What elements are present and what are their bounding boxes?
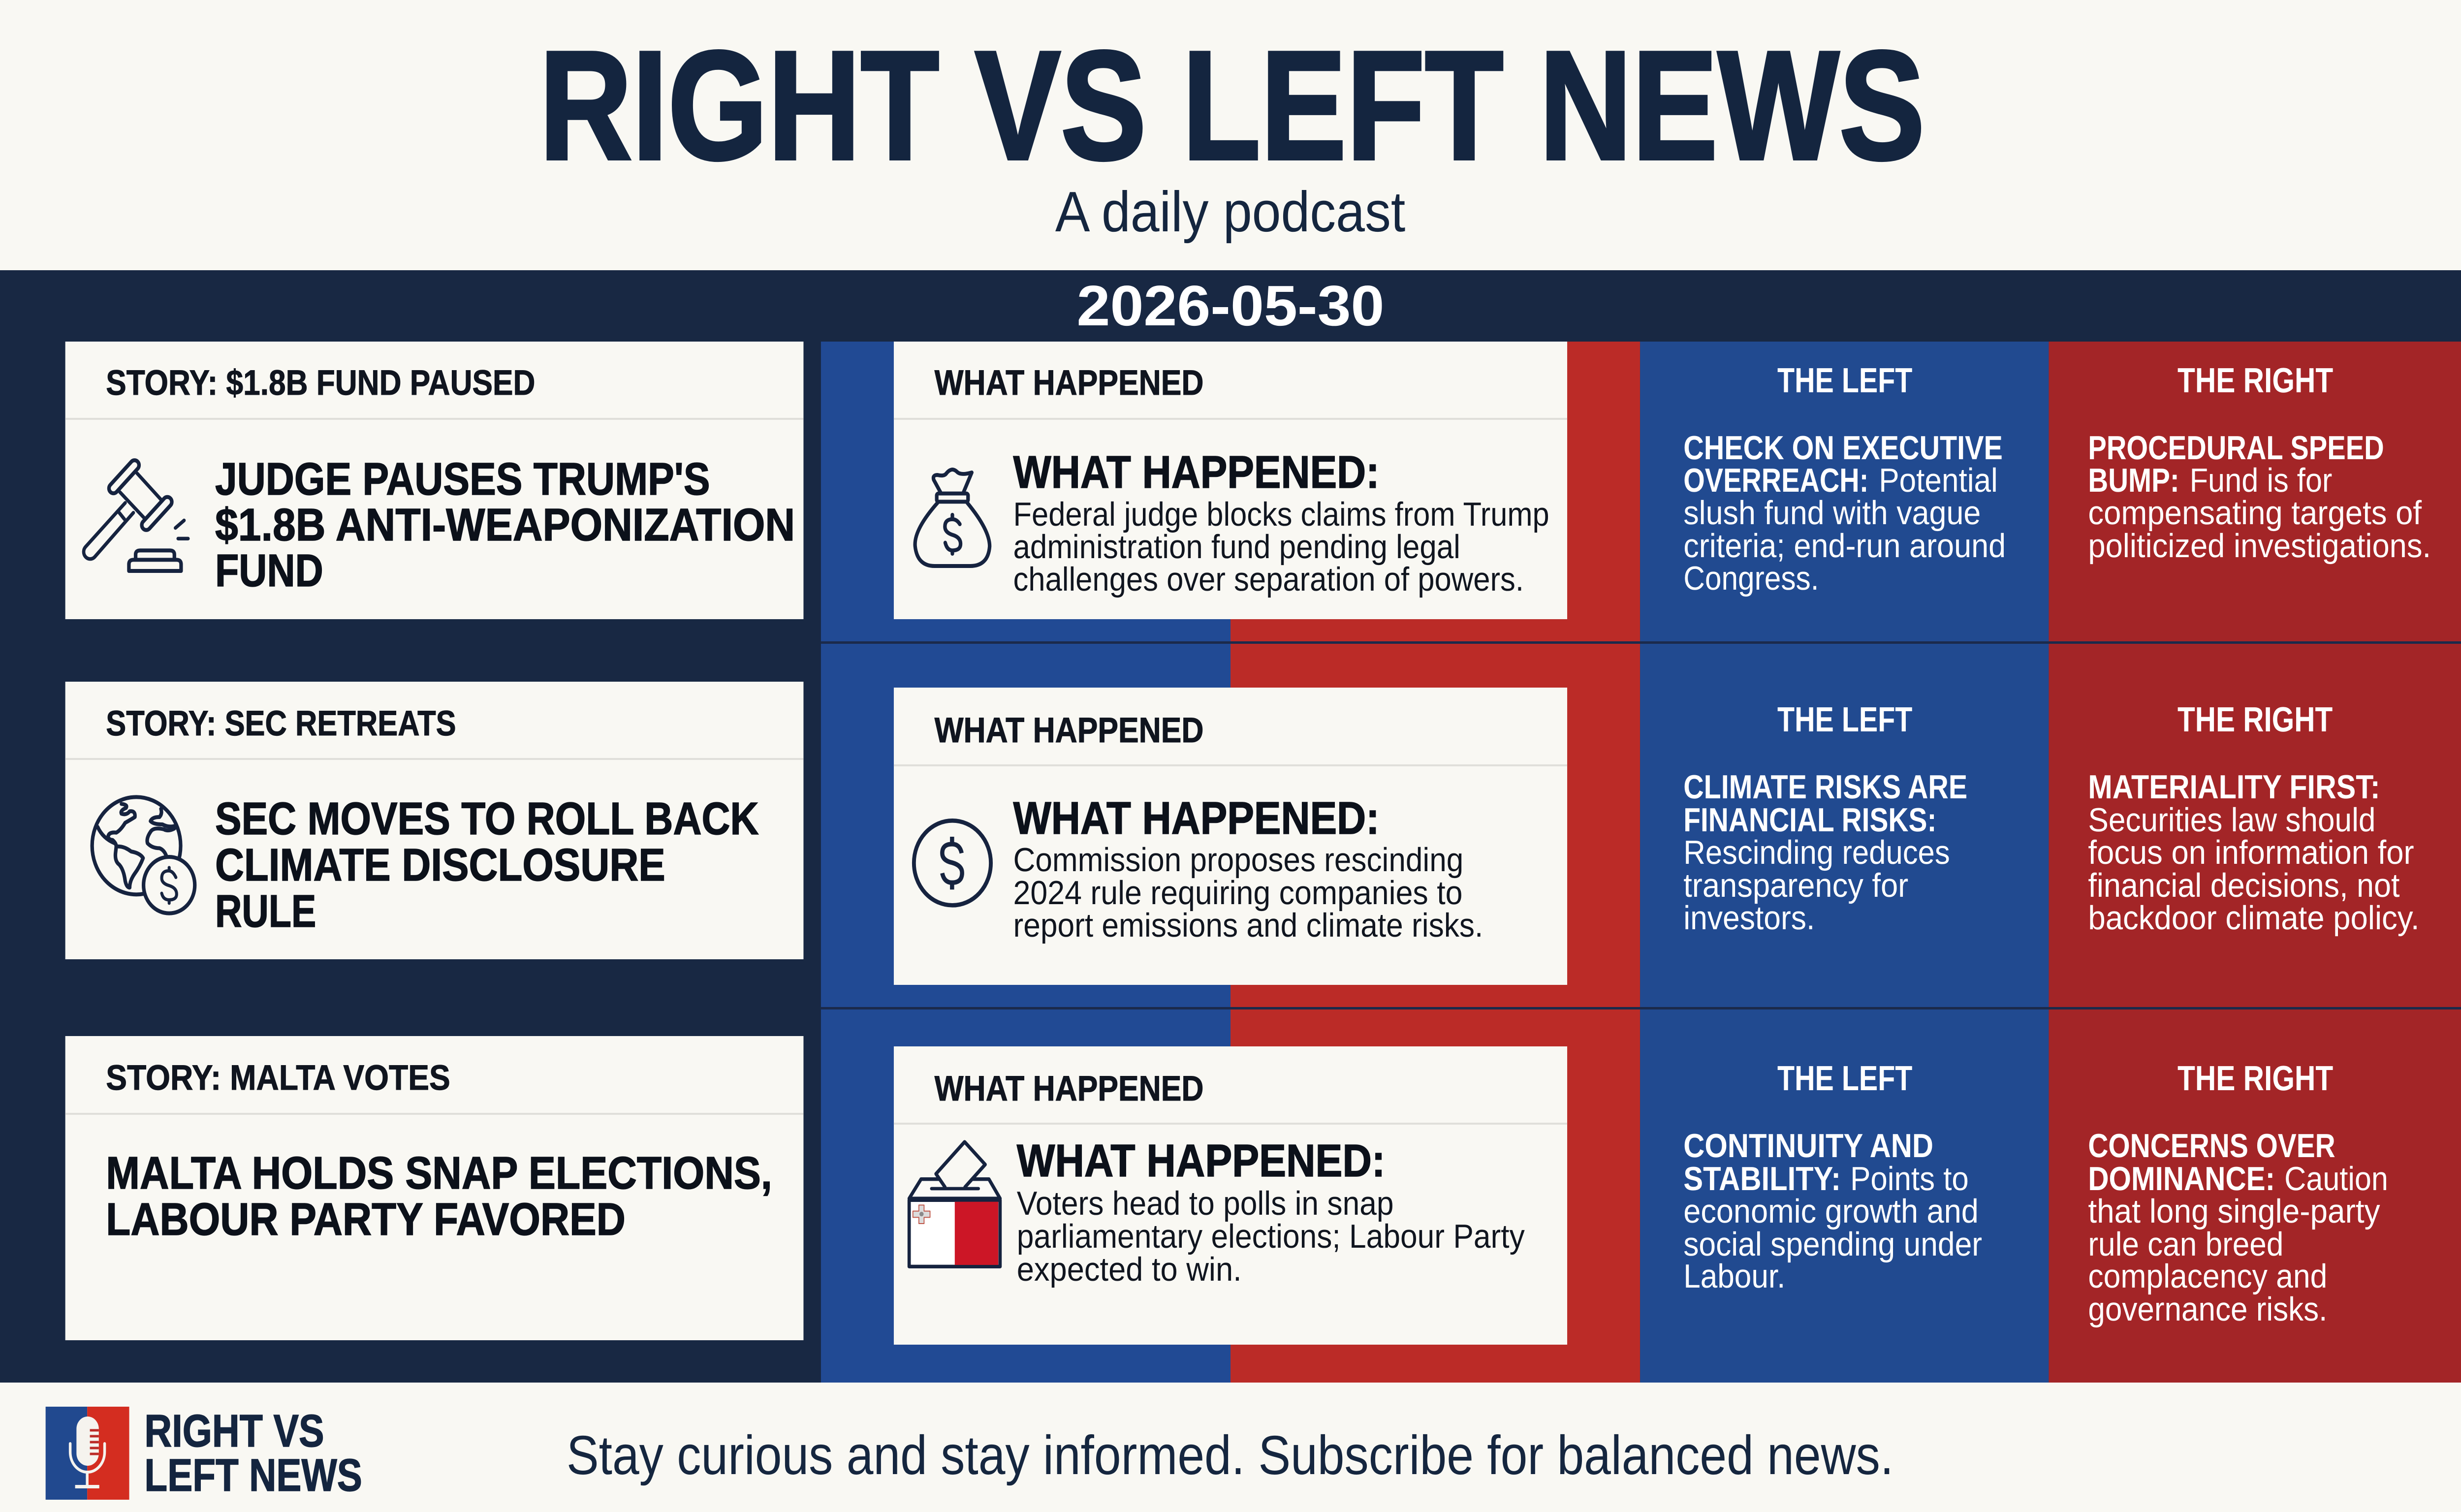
story 1 headline: $1.8B ANTI-WEAPONIZATION	[215, 499, 795, 550]
argument: FINANCIAL RISKS:	[1683, 801, 1936, 839]
footer logo wordmark	[144, 1405, 362, 1501]
argument: Caution	[2284, 1160, 2388, 1197]
argument: transparency for	[1683, 867, 1908, 904]
what happened 2 text	[1013, 841, 1483, 944]
footer logo: microphone badge	[46, 1407, 129, 1500]
argument: complacency and	[2088, 1258, 2327, 1295]
argument	[1683, 1127, 1982, 1295]
story 2 headline	[215, 793, 759, 937]
argument: DOMINANCE:	[2088, 1160, 2275, 1197]
argument: that long single-party	[2088, 1193, 2380, 1230]
what happened 3 text: expected to win.	[1017, 1251, 1242, 1288]
what happened 1 heading: WHAT HAPPENED:	[1013, 446, 1380, 498]
what happened 3 label: WHAT HAPPENED	[935, 1069, 1203, 1108]
what happened 3 text: Voters head to polls in snap	[1017, 1185, 1394, 1222]
panel: story 2	[65, 682, 803, 959]
argument: Labour.	[1683, 1258, 1785, 1295]
argument	[1683, 768, 1967, 937]
argument: Securities law should	[2088, 801, 2375, 839]
argument: BUMP:	[2088, 462, 2179, 499]
argument: social spending under	[1683, 1226, 1982, 1263]
footer logo wordmark: RIGHT VS	[144, 1405, 324, 1456]
subtitle: A daily podcast	[1055, 180, 1405, 244]
panel: the right, story 1	[2088, 361, 2431, 565]
story 3 headline: LABOUR PARTY FAVORED	[106, 1194, 626, 1245]
icon: dollar circle	[914, 820, 991, 905]
panel: the right, story 3	[2088, 1059, 2388, 1328]
argument: Congress.	[1683, 560, 1819, 597]
panel: what happened 2	[894, 688, 1567, 985]
argument: CONCERNS OVER	[2088, 1127, 2335, 1165]
heading: THE RIGHT	[2177, 1059, 2333, 1098]
argument: rule can breed	[2088, 1226, 2283, 1263]
argument: Fund is for	[2190, 462, 2332, 499]
panel: what happened 3	[894, 1046, 1567, 1345]
argument: PROCEDURAL SPEED	[2088, 429, 2384, 467]
argument: governance risks.	[2088, 1291, 2327, 1328]
argument: MATERIALITY FIRST:	[2088, 768, 2380, 806]
argument: politicized investigations.	[2088, 527, 2431, 565]
icon: money bag	[915, 470, 990, 566]
story 3 headline: MALTA HOLDS SNAP ELECTIONS,	[106, 1147, 772, 1198]
what happened 1 text: challenges over separation of powers.	[1013, 561, 1524, 598]
what happened 3 text	[1017, 1185, 1525, 1288]
argument	[2088, 429, 2431, 565]
story 3 headline	[106, 1147, 772, 1245]
what happened 3 heading: WHAT HAPPENED:	[1017, 1135, 1385, 1186]
what happened 1 text	[1013, 496, 1549, 598]
what happened 3 text: parliamentary elections; Labour Party	[1017, 1218, 1525, 1255]
what happened 2 text: 2024 rule requiring companies to	[1013, 874, 1462, 912]
argument: STABILITY:	[1683, 1160, 1841, 1197]
argument	[2088, 768, 2420, 937]
heading: THE RIGHT	[2177, 700, 2333, 739]
argument: Points to	[1850, 1160, 1969, 1197]
argument	[1683, 429, 2006, 597]
argument: CLIMATE RISKS ARE	[1683, 768, 1967, 806]
story 2 label: STORY: SEC RETREATS	[106, 704, 456, 743]
column backgrounds	[821, 342, 2461, 1383]
story 1 label: STORY: $1.8B FUND PAUSED	[106, 363, 535, 403]
heading: THE LEFT	[1777, 1059, 1912, 1098]
argument: OVERREACH:	[1683, 462, 1868, 499]
icon: ballot box with Malta flag	[909, 1142, 1000, 1266]
what happened 1 text: Federal judge blocks claims from Trump	[1013, 496, 1549, 533]
argument: Potential	[1879, 462, 1998, 499]
what happened 1 label: WHAT HAPPENED	[935, 363, 1203, 403]
argument: financial decisions, not	[2088, 867, 2400, 904]
what happened 2 label: WHAT HAPPENED	[935, 711, 1203, 750]
argument: investors.	[1683, 899, 1815, 937]
story 2 headline: SEC MOVES TO ROLL BACK	[215, 793, 759, 844]
argument: slush fund with vague	[1683, 494, 1981, 532]
panel: story 1	[65, 342, 803, 619]
what happened 2 text: Commission proposes rescinding	[1013, 841, 1463, 879]
heading: THE LEFT	[1777, 361, 1912, 400]
footer tagline: Stay curious and stay informed. Subscribe for balanced news.	[567, 1424, 1893, 1486]
panel: the left, story 2	[1683, 700, 1967, 937]
argument: Rescinding reduces	[1683, 834, 1950, 871]
argument: criteria; end-run around	[1683, 527, 2006, 565]
what happened 2 heading: WHAT HAPPENED:	[1013, 792, 1380, 844]
argument	[2088, 1127, 2388, 1328]
panel: the left, story 1	[1683, 361, 2006, 597]
footer logo wordmark: LEFT NEWS	[144, 1449, 362, 1501]
title: RIGHT VS LEFT NEWS	[539, 19, 1925, 192]
panel: story 3	[65, 1036, 803, 1340]
argument: compensating targets of	[2088, 494, 2422, 532]
argument: CHECK ON EXECUTIVE	[1683, 429, 2003, 467]
date: 2026-05-30	[1077, 274, 1384, 338]
story 1 headline: JUDGE PAUSES TRUMP'S	[215, 453, 710, 504]
what happened 1 text: administration fund pending legal	[1013, 528, 1460, 566]
heading: THE LEFT	[1777, 700, 1912, 739]
argument: CONTINUITY AND	[1683, 1127, 1933, 1165]
story 1 headline: FUND	[215, 545, 323, 596]
argument: focus on information for	[2088, 834, 2414, 871]
panel: the left, story 3	[1683, 1059, 1982, 1295]
story 3 label: STORY: MALTA VOTES	[106, 1058, 450, 1098]
panel: the right, story 2	[2088, 700, 2420, 937]
heading: THE RIGHT	[2177, 361, 2333, 400]
argument: economic growth and	[1683, 1193, 1979, 1230]
icon: globe with dollar coin	[92, 797, 195, 914]
story 2 headline: CLIMATE DISCLOSURE	[215, 839, 665, 890]
what happened 2 text: report emissions and climate risks.	[1013, 907, 1483, 944]
icon: gavel	[84, 458, 188, 571]
story 1 headline	[215, 453, 795, 596]
story 2 headline: RULE	[215, 885, 316, 937]
argument: backdoor climate policy.	[2088, 899, 2420, 937]
main navy band	[0, 270, 2461, 1383]
panel: what happened 1	[894, 342, 1567, 619]
